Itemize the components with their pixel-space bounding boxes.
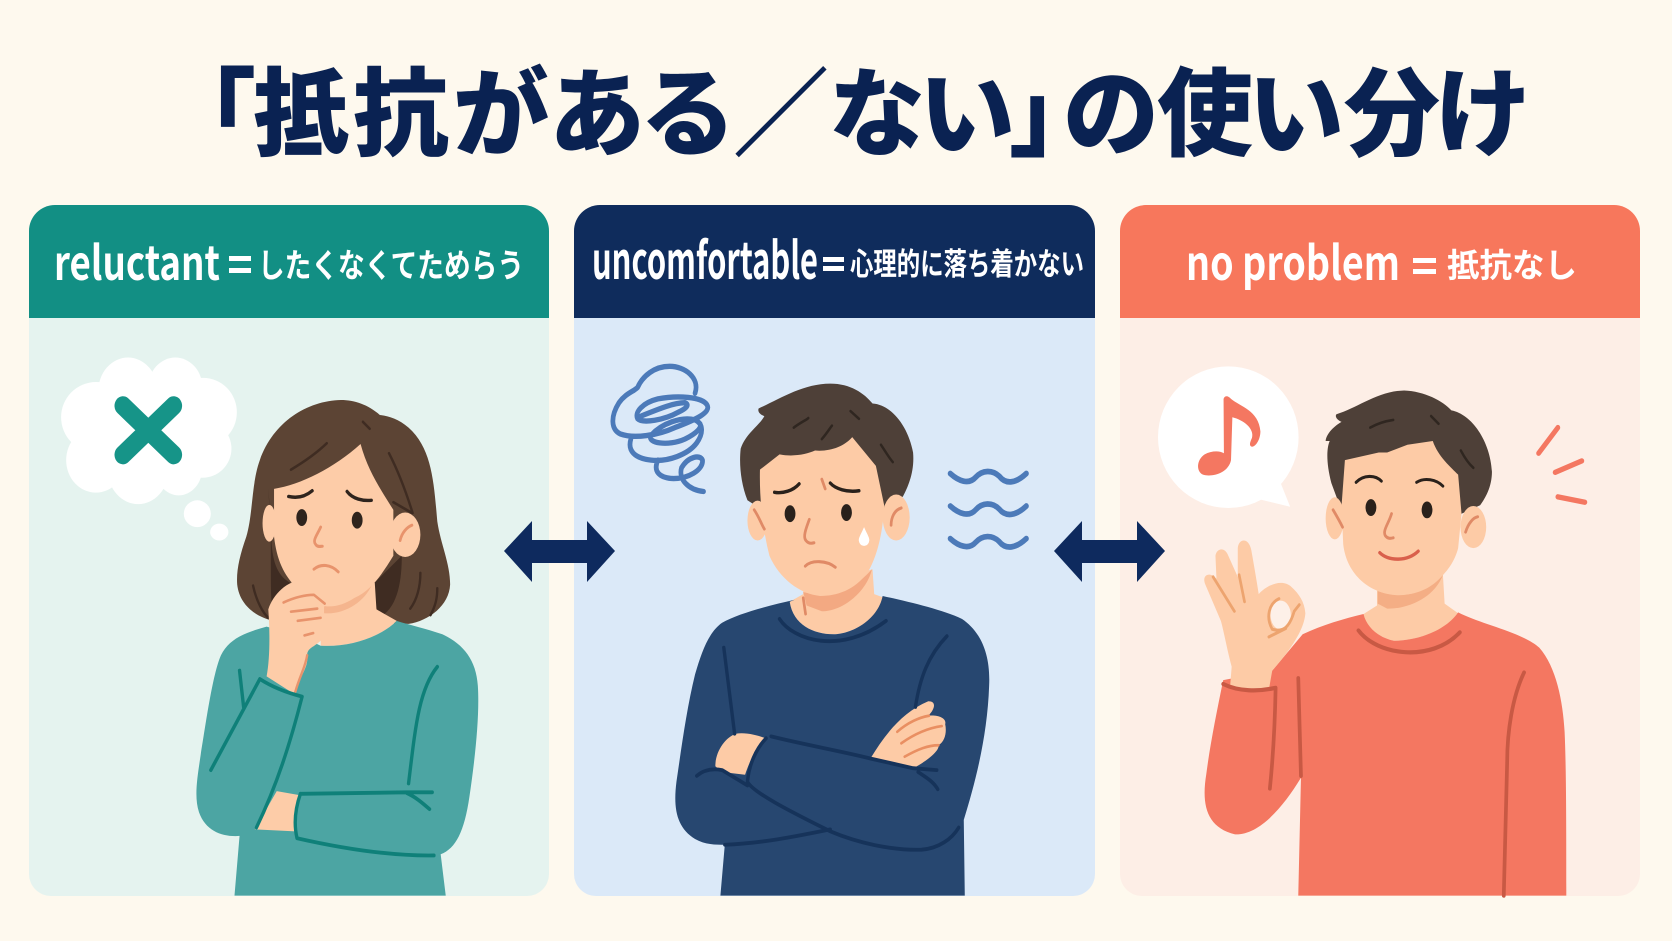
arrow: between reluctant and uncomfortable xyxy=(504,521,615,582)
icon: scribble xyxy=(613,366,708,491)
icon: speech bubble with music note xyxy=(1158,366,1299,508)
illustration: woman thinking xyxy=(61,358,478,896)
icon: tear drop xyxy=(859,527,869,546)
header: reluctant: reluctant xyxy=(54,225,220,294)
panel: uncomfortable xyxy=(574,205,1095,896)
man figure: OK sign xyxy=(1204,390,1566,896)
icon: wavy lines xyxy=(950,471,1026,547)
header: uncomfortable xyxy=(574,205,1095,318)
panel: reluctant xyxy=(29,205,549,896)
icon: thought bubble with cross xyxy=(61,358,237,540)
header: uncomfortable: uncomfortable xyxy=(592,220,818,294)
header: no problem: 抵抗なし xyxy=(1447,239,1577,287)
illustration: man OK gesture xyxy=(1158,366,1585,896)
header: no problem xyxy=(1120,205,1640,318)
panel: no problem xyxy=(1120,205,1640,896)
icon: sparkle lines xyxy=(1539,428,1585,502)
header: no problem: no problem xyxy=(1186,225,1400,294)
illustration: uneasy man xyxy=(613,366,1026,896)
woman figure xyxy=(196,400,478,896)
man figure: arms crossed xyxy=(675,384,989,896)
header: reluctant xyxy=(29,205,549,318)
arrow: between uncomfortable and no problem xyxy=(1054,521,1165,582)
header: reluctant: したくなくてためらう xyxy=(258,239,524,287)
header: uncomfortable: 心理的に落ち着かない xyxy=(850,239,1084,284)
title: 「抵抗がある／ない」の使い分け xyxy=(160,37,1531,176)
